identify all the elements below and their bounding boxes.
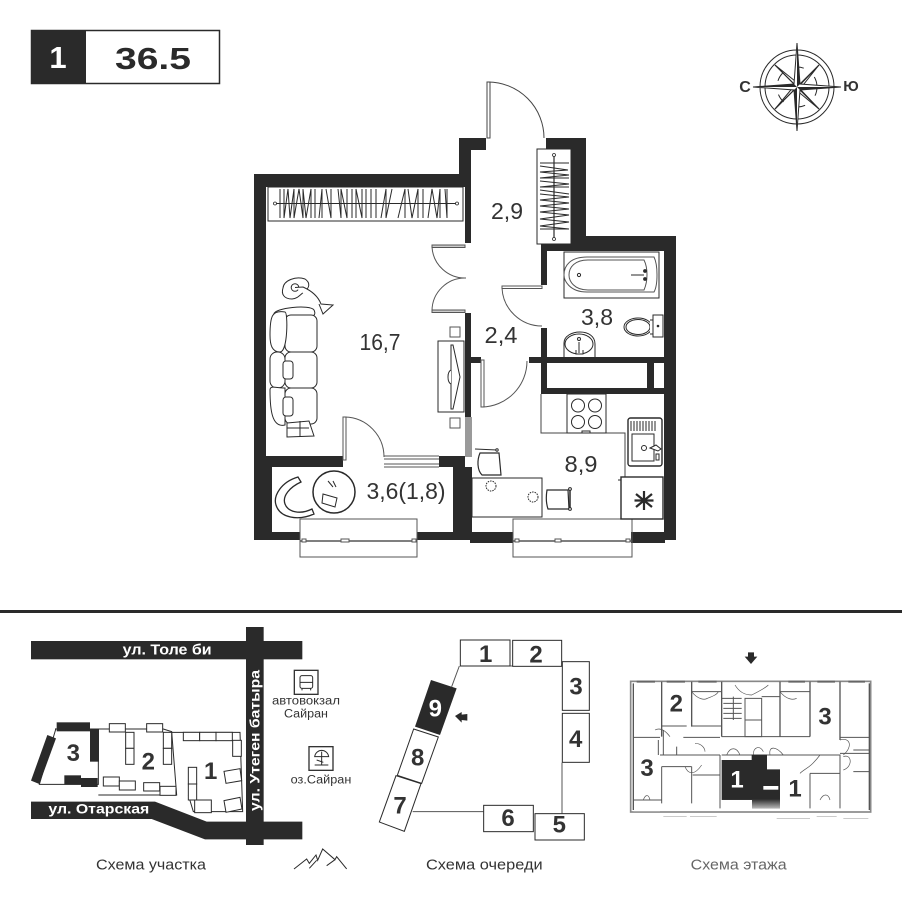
highlighted apartment <box>722 755 780 809</box>
bus station icon and label: Сайран <box>284 707 328 721</box>
site outline and buildings: 2 <box>142 749 155 776</box>
kitchen sink <box>628 418 662 466</box>
area labels: 16,7 <box>360 329 400 355</box>
apartment type labels: 3 <box>640 755 654 782</box>
compass rose: Ю <box>843 78 859 95</box>
header: apartment type and area <box>31 30 220 84</box>
site plan <box>31 627 351 873</box>
wardrobe in hall <box>537 149 571 244</box>
site outline and buildings <box>31 722 243 813</box>
fridge <box>618 477 663 519</box>
apartment type labels: 2 <box>670 690 683 717</box>
divider <box>0 610 902 613</box>
area labels <box>360 198 613 504</box>
site outline and buildings: 3 <box>67 740 80 767</box>
building phases scheme: 2 <box>529 642 543 669</box>
dining chair top <box>475 449 501 475</box>
building phases scheme: 6 <box>501 805 515 832</box>
exterior and interior walls <box>254 138 676 543</box>
loggia armchair <box>275 477 314 518</box>
building phases scheme <box>379 640 589 873</box>
apartment type labels: 3 <box>818 704 832 731</box>
tv stand <box>438 327 464 428</box>
building phases scheme: 5 <box>553 812 566 839</box>
bathtub <box>564 252 659 298</box>
header: apartment type and area: 1 <box>49 40 67 75</box>
floor scheme <box>631 652 871 874</box>
dining chair right <box>546 488 571 510</box>
cooktop <box>567 394 606 433</box>
streets: ул. Утеген батыра <box>246 670 262 811</box>
compass rose <box>739 43 859 131</box>
building phases scheme: 9 <box>429 696 442 723</box>
area labels: 2,4 <box>484 322 518 348</box>
floor outline and partitions <box>631 681 871 818</box>
area labels: 3,6(1,8) <box>366 478 446 504</box>
dining desk <box>472 478 542 517</box>
building phases scheme: 4 <box>569 726 583 753</box>
bus station icon and label <box>272 670 340 721</box>
floor plan <box>254 82 676 557</box>
balcony window right <box>513 519 632 557</box>
arrow <box>745 652 757 664</box>
scheme caption: Схема очереди <box>426 857 543 873</box>
lake icon and label: оз.Сайран <box>291 772 351 786</box>
toilet <box>624 315 663 337</box>
phase 3 buildings <box>31 722 99 787</box>
double door to room <box>432 245 466 312</box>
header: apartment type and area: 36.5 <box>115 41 191 76</box>
wardrobe in room <box>268 187 463 221</box>
site outline and buildings: 1 <box>204 758 217 785</box>
building phases scheme: 3 <box>569 674 583 701</box>
streets: ул. Отарская <box>48 801 149 817</box>
phase blocks <box>379 640 589 840</box>
streets <box>31 627 302 845</box>
building phases scheme: 1 <box>479 641 492 668</box>
mountains icon <box>294 849 347 869</box>
balcony door and window <box>343 417 439 467</box>
sofa <box>270 307 317 437</box>
apartment type labels: 1 <box>788 775 802 802</box>
lake icon and label <box>291 747 351 786</box>
washbasin <box>564 332 595 357</box>
loggia round table <box>313 471 355 513</box>
area labels: 3,8 <box>581 304 613 330</box>
highlighted apartment: 1 <box>730 766 744 793</box>
site outline <box>413 666 563 813</box>
building phases scheme: 8 <box>411 744 424 771</box>
site plan caption: Схема участка <box>96 857 206 873</box>
kitchen counter <box>541 394 625 477</box>
apartment type labels <box>640 690 832 802</box>
entrance door <box>487 82 544 138</box>
area labels: 2,9 <box>491 198 523 224</box>
arrow <box>455 712 467 723</box>
compass rose: С <box>739 79 751 96</box>
floor lamp <box>282 278 333 314</box>
bathroom door <box>502 286 542 326</box>
kitchen door <box>481 360 527 407</box>
streets: ул. Толе би <box>123 642 212 658</box>
phase 1 and 2 buildings <box>103 724 242 813</box>
area labels: 8,9 <box>564 451 598 477</box>
balcony window left <box>300 519 417 557</box>
floor scheme caption: Схема этажа <box>691 858 787 874</box>
building phases scheme: 7 <box>393 793 407 820</box>
bus station icon and label: автовокзал <box>272 693 340 707</box>
